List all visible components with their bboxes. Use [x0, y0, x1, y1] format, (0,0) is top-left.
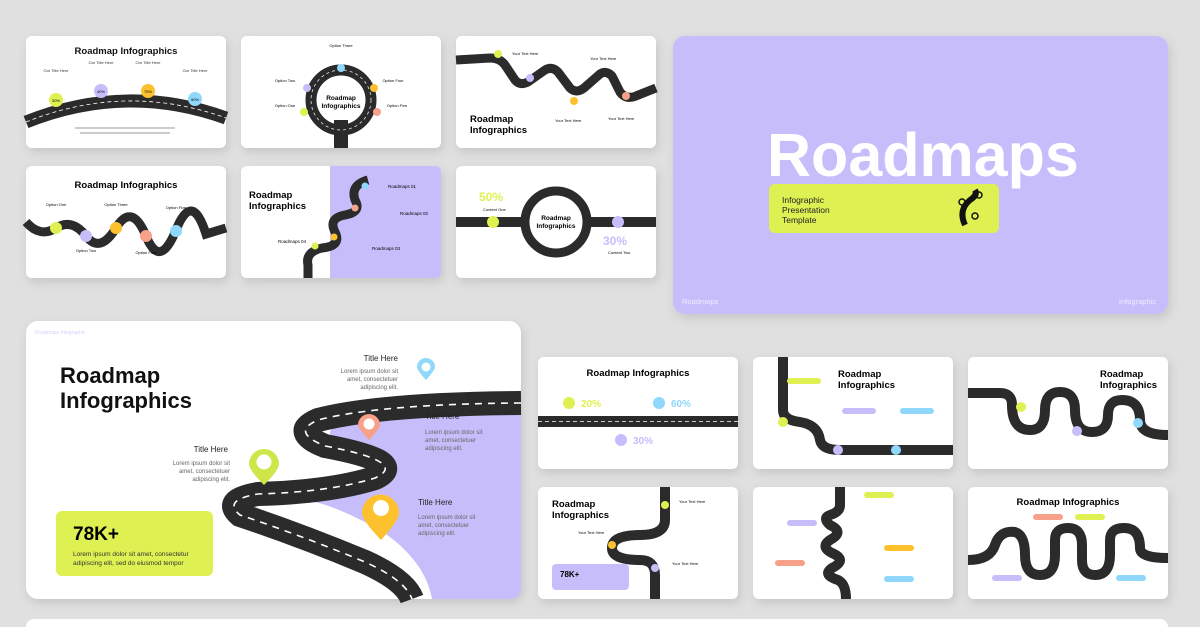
slide: vertical road with stat: Your Text Here — [578, 530, 605, 535]
hero card: Roadmaps — [673, 36, 1168, 314]
slide: top arc roadmap: Our Title Here — [183, 68, 208, 73]
slide: zigzag road — [456, 36, 656, 148]
slide: circle percentages: 50% — [479, 190, 503, 204]
slide: circle percentages: Content Two — [608, 250, 631, 255]
big slide: winding road: amet, consectetuer — [179, 469, 230, 475]
big slide: winding road: Lorem ipsum dolor sit — [173, 461, 230, 467]
bottom strip — [26, 619, 1168, 627]
slide: straight road pins — [538, 357, 738, 469]
slide: serpentine with purple: Roadmaps 04 — [278, 239, 307, 244]
slide: ring roadmap: Option Two — [275, 78, 296, 83]
slide: top arc roadmap: Our Title Here — [89, 60, 114, 65]
slide: top arc roadmap: Our Title Here — [44, 68, 69, 73]
slide: vertical road with stat: Your Text Here — [679, 499, 706, 504]
big slide: winding road: amet, consectetuer — [418, 523, 469, 529]
big slide: winding road: amet, consectetuer — [347, 377, 398, 383]
slide: circle percentages: Roadmap — [541, 215, 571, 222]
slide: zigzag road: Your Text Here — [512, 51, 539, 56]
big slide: winding road: adipiscing elit. — [192, 477, 230, 483]
hero card: Roadmaps: Template — [782, 215, 817, 225]
big slide: winding road: Title Here — [425, 412, 460, 421]
big slide: winding road: Infographics — [60, 388, 192, 413]
slide: serpentine vertical labels — [753, 487, 953, 599]
slide: curvy road right title: Roadmap — [1100, 369, 1143, 380]
slide: looping road — [968, 487, 1168, 599]
stat box — [56, 511, 213, 576]
slide: ring roadmap: Option One — [275, 103, 296, 108]
slide: ring roadmap: Option Four — [382, 78, 404, 83]
slide: serpentine with purple: Infographics — [249, 201, 306, 212]
slide: straight road pins: 60% — [671, 399, 691, 410]
hero card: Roadmaps: Infographic — [1119, 297, 1156, 306]
slide: zigzag road: Infographics — [470, 125, 527, 136]
slide: step road with labels: Roadmap — [838, 369, 881, 380]
slide: circle percentages: Content One — [483, 207, 506, 212]
slide: zigzag road: Your Text Here — [555, 118, 582, 123]
hero card: Roadmaps: Roadmaps — [682, 297, 719, 306]
purple area — [315, 398, 521, 599]
callouts: Title Here — [364, 354, 399, 363]
slide: vertical road with stat: Infographics — [552, 510, 609, 521]
slide: top arc roadmap: 30% — [52, 98, 60, 103]
hero card: Roadmaps: Presentation — [782, 205, 830, 215]
big slide: winding road: Lorem ipsum dolor sit — [418, 515, 476, 521]
icon: road logo — [959, 190, 982, 225]
slide: top arc roadmap: Roadmap Infographics — [75, 46, 177, 57]
slide: serpentine with purple — [241, 166, 441, 278]
hero card: Roadmaps: Infographic — [782, 195, 825, 205]
slide: vertical road with stat: Roadmap — [552, 499, 595, 510]
slide: serpentine with purple: Roadmaps 02 — [400, 211, 429, 216]
slide: wavy options: Roadmap Infographics — [75, 180, 177, 191]
road — [234, 403, 521, 599]
stat box: 78K+ — [73, 524, 119, 545]
slide: curvy road right title: Infographics — [1100, 380, 1157, 391]
big slide: winding road: Lorem ipsum dolor sit — [425, 430, 483, 436]
slide: serpentine with purple: Roadmaps 03 — [372, 246, 401, 251]
big slide: winding road: Title Here — [418, 498, 453, 507]
slide: looping road: Roadmap Infographics — [1017, 497, 1119, 508]
slide: wavy options — [26, 166, 226, 278]
slide: ring roadmap: Option Three — [329, 43, 353, 48]
slide: straight road pins: Roadmap Infographics — [587, 368, 689, 379]
slide: ring roadmap: Option Five — [387, 103, 408, 108]
slide: zigzag road: Your Text Here — [608, 116, 635, 121]
slide: wavy options: Option Three — [104, 202, 128, 207]
big slide: winding road: amet, consectetuer — [425, 438, 476, 444]
slide: curvy road right title — [968, 357, 1168, 469]
slide: vertical road with stat: 78K+ — [560, 570, 580, 579]
stat box: adipiscing elit, sed do eiusmod tempor — [73, 560, 184, 567]
slide: vertical road with stat — [538, 487, 738, 599]
slide: serpentine with purple: Roadmap — [249, 190, 292, 201]
slide: zigzag road: Roadmap — [470, 114, 513, 125]
big slide: winding road — [26, 321, 521, 599]
slide: wavy options: Option Two — [76, 248, 97, 253]
stat box: Lorem ipsum dolor sit amet, consectetur — [73, 551, 189, 558]
pins — [417, 358, 435, 380]
slide: step road with labels — [753, 357, 953, 469]
slide: wavy options: Option Five — [166, 205, 187, 210]
big slide: winding road: adipiscing elit. — [418, 531, 456, 537]
slide: circle percentages: Infographics — [536, 223, 576, 230]
slide: ring roadmap: Infographics — [321, 103, 361, 110]
slide: top arc roadmap: 75% — [144, 89, 152, 94]
slide: step road with labels: Infographics — [838, 380, 895, 391]
slide: vertical road with stat: Your Text Here — [672, 561, 699, 566]
slide: wavy options: Option One — [46, 202, 67, 207]
slide: top arc roadmap — [26, 36, 226, 148]
slide: circle percentages — [456, 166, 656, 278]
big slide: winding road: Roadmap — [60, 363, 160, 388]
slide: ring roadmap: Roadmap — [326, 95, 356, 102]
slide: circle percentages: 30% — [603, 234, 627, 248]
slide: wavy options: Option Four — [135, 250, 157, 255]
slide: top arc roadmap: 40% — [97, 89, 105, 94]
slide: serpentine with purple: Roadmaps 01 — [388, 184, 417, 189]
big slide: winding road: adipiscing elit. — [360, 385, 398, 391]
slide: ring roadmap — [241, 36, 441, 148]
slide: straight road pins: 20% — [581, 399, 601, 410]
big slide: winding road: Roadmaps Infographic — [35, 330, 86, 336]
slide: zigzag road: Your Text Here — [590, 56, 617, 61]
slide: straight road pins: 30% — [633, 436, 653, 447]
big slide: winding road: Lorem ipsum dolor sit — [341, 369, 398, 375]
big slide: winding road: Title Here — [194, 445, 229, 454]
big slide: winding road: adipiscing elit. — [425, 446, 463, 452]
slide: top arc roadmap: Our Title Here — [136, 60, 161, 65]
slide: top arc roadmap: 50% — [191, 97, 199, 102]
hero card: Roadmaps: Roadmaps — [767, 121, 1079, 189]
